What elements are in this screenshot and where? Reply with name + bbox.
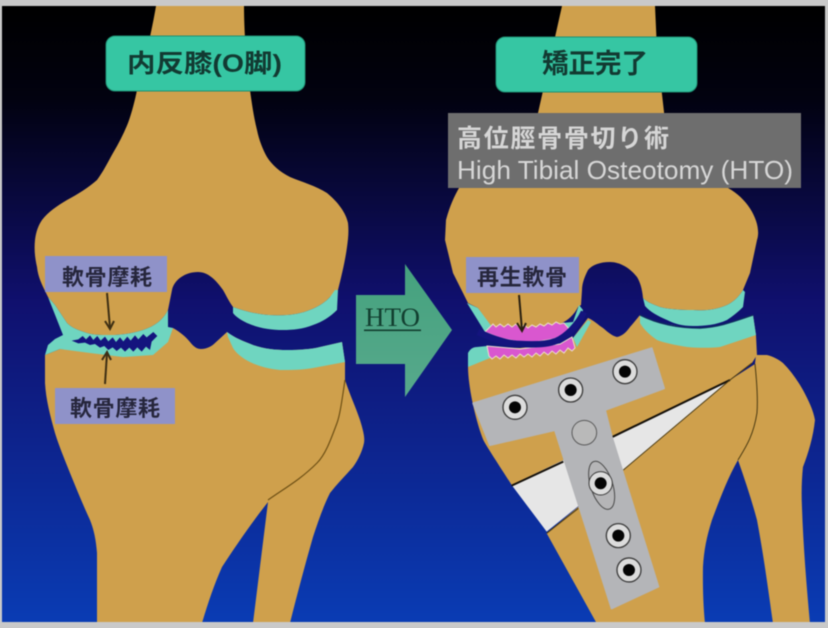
right fibula [738, 355, 815, 623]
header: correction complete: 矯正完了 [542, 49, 648, 79]
bone graft wedge [512, 380, 730, 532]
regenerated cartilage lower [487, 337, 575, 359]
tibia fibula boundary line [268, 380, 345, 500]
joint space line [478, 312, 584, 344]
lateral tibial cartilage [227, 332, 345, 370]
worn cartilage jagged gap [72, 332, 157, 352]
lateral femoral cartilage [233, 290, 338, 330]
left femur [35, 6, 348, 335]
medial cartilage [45, 297, 173, 357]
right medial femoral cartilage right [562, 305, 583, 331]
header: varus knee [106, 36, 305, 91]
header: varus knee: 内反膝(O脚) [127, 50, 282, 78]
label: regenerated cartilage: 再生軟骨 [477, 265, 567, 290]
arrow: lower cartilage wear pointer [102, 352, 111, 384]
procedure name box: High Tibial Osteotomy (HTO) [457, 155, 793, 185]
arrow: HTO transition: HTO [365, 303, 420, 332]
screw 3 [503, 395, 527, 419]
header: correction complete [496, 37, 697, 92]
procedure name box [448, 113, 801, 188]
label: cartilage wear upper: 軟骨摩耗 [62, 265, 152, 290]
screw 5 [606, 524, 630, 548]
right lateral femoral cartilage [643, 290, 745, 326]
right medial tibial cartilage right [573, 320, 591, 347]
screw 2 [559, 378, 583, 402]
right femur [445, 6, 758, 328]
label: regenerated cartilage [466, 257, 579, 293]
label: cartilage wear lower [55, 388, 175, 424]
regenerated cartilage upper [485, 322, 570, 342]
arrow: HTO transition [356, 264, 452, 397]
osteotomy cut lines [512, 380, 730, 486]
arrow: upper cartilage wear pointer [105, 293, 114, 329]
oval slot [588, 460, 616, 510]
right tibia proximal fragment [468, 315, 757, 485]
screw 6 [617, 558, 641, 582]
procedure name box: 高位脛骨骨切り術 [457, 125, 669, 153]
right lateral tibial cartilage [640, 315, 756, 348]
right tibia distal fragment [547, 364, 757, 623]
screw 4 [589, 472, 612, 495]
panel: knee after correction [445, 6, 815, 623]
screw 1 [613, 360, 637, 384]
right medial tibial cartilage left [468, 346, 490, 367]
right lateral joint line [640, 315, 753, 328]
T plate [473, 348, 664, 608]
panel: varus knee before correction [35, 6, 364, 623]
empty screw hole [572, 420, 597, 445]
left tibia and fibula [45, 328, 364, 623]
right medial femoral cartilage left [467, 303, 492, 332]
arrow: regenerated cartilage pointer [517, 295, 526, 331]
label: cartilage wear upper [45, 256, 167, 292]
label: cartilage wear lower: 軟骨摩耗 [70, 396, 160, 421]
